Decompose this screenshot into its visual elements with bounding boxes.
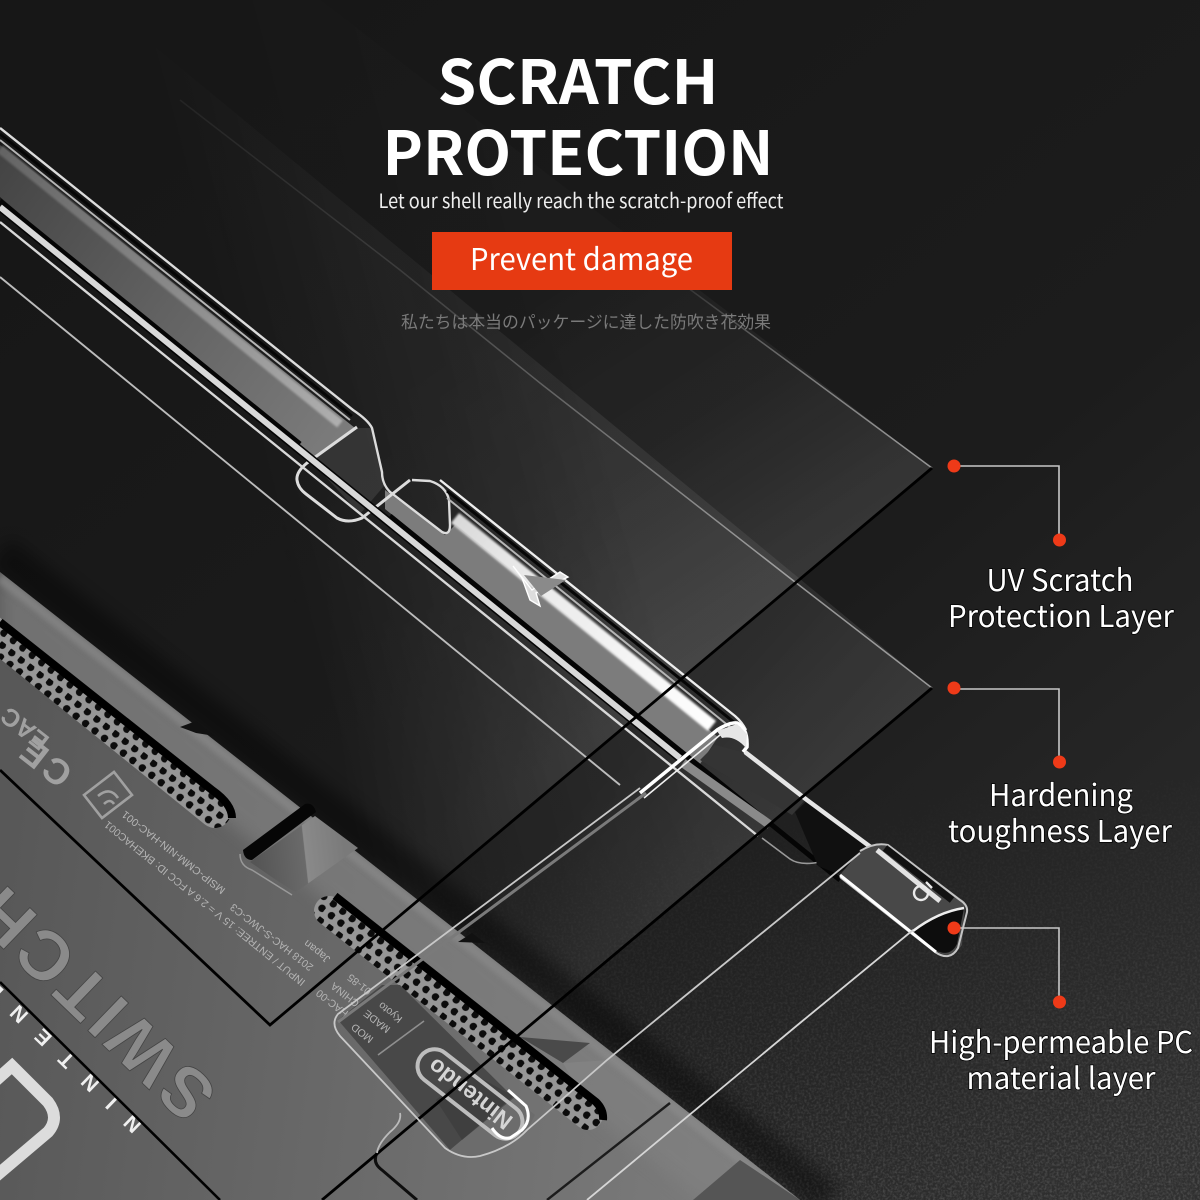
shell model text: 01-85 xyxy=(345,971,374,997)
callout: high-permeable PC material layer: material layer xyxy=(966,1054,1156,1098)
lip line xyxy=(745,752,872,848)
shell inner divider xyxy=(378,1021,424,1055)
body surface xyxy=(0,572,800,1200)
end cap xyxy=(840,844,967,956)
tube clip detail xyxy=(513,566,568,606)
lower groove xyxy=(0,201,840,880)
callout: UV scratch protection layer xyxy=(948,460,1174,636)
shell model text: Kyoto xyxy=(376,999,405,1025)
regulatory text: Japan xyxy=(302,937,333,965)
film layer: UV scratch protection xyxy=(454,290,932,858)
switch logo outline xyxy=(0,1066,54,1176)
shell corner bump xyxy=(377,1113,400,1153)
console body xyxy=(0,552,830,1200)
bright stripe xyxy=(455,518,712,726)
shell outline inner xyxy=(338,793,646,1022)
title: PROTECTION xyxy=(382,104,774,193)
leather texture xyxy=(546,870,1200,1200)
cap dark groove xyxy=(885,848,952,900)
title: SCRATCH xyxy=(438,33,718,122)
power icon xyxy=(914,882,932,900)
lower tube lines xyxy=(0,207,820,863)
strip below flange xyxy=(683,763,770,825)
shell model text: MADE xyxy=(362,1007,393,1035)
notch clip loop xyxy=(297,427,410,521)
shell model text xyxy=(314,971,405,1045)
shell outline top xyxy=(334,788,860,1157)
regulatory text: MSIP-CMM-NIN-HAC-001 xyxy=(119,808,228,896)
badge: prevent damage: Prevent damage xyxy=(470,235,693,279)
title xyxy=(382,33,774,193)
inner dark end xyxy=(700,745,805,815)
film layer: hardening toughness xyxy=(180,100,932,984)
lower-right edge darks xyxy=(375,1103,670,1200)
hardening layer edge xyxy=(322,688,932,1200)
callout: high-permeable PC material layer xyxy=(929,922,1193,1098)
body lower-left edge xyxy=(0,982,220,1200)
vent right xyxy=(329,896,603,1120)
upper lines xyxy=(0,128,746,730)
cap white stripe xyxy=(877,850,940,901)
cap opening xyxy=(913,908,964,953)
tube band right xyxy=(385,490,718,764)
UV layer edge xyxy=(0,468,932,1025)
rim patches under films xyxy=(520,1037,590,1063)
shell flange fill xyxy=(717,724,747,748)
KC mark xyxy=(84,772,132,818)
cap lower edge xyxy=(840,875,936,952)
vent left xyxy=(0,622,232,818)
tube band left highlight xyxy=(0,149,340,424)
shell model text: MOD xyxy=(349,1020,376,1045)
body shadow xyxy=(0,552,830,1200)
small rim gaps xyxy=(180,721,485,943)
shell corner panel xyxy=(314,971,535,1157)
regulatory text: INPUT / ENTREE: 15 V = 2.6 A FCC ID: BKEHAC001 xyxy=(102,818,308,988)
badge highlight xyxy=(492,1090,528,1138)
badge: prevent damage xyxy=(432,232,732,290)
shell double line xyxy=(644,735,720,798)
rim band xyxy=(0,583,598,1096)
callout: hardening toughness layer: toughness Layer xyxy=(948,807,1172,851)
flange xyxy=(640,723,747,793)
latch notch xyxy=(240,804,358,895)
callout: hardening toughness layer xyxy=(948,682,1172,851)
shell model text: HAC-00 xyxy=(314,987,351,1019)
callout: UV scratch protection layer: UV Scratch xyxy=(986,556,1134,600)
callout: high-permeable PC material layer: High-permeable PC xyxy=(929,1018,1193,1062)
layer black edges and shell lines xyxy=(0,468,932,1200)
CE mark: CE xyxy=(9,728,80,796)
right lower darker zone xyxy=(693,1160,800,1200)
shell model text: CHINA xyxy=(329,980,362,1009)
callout: UV scratch protection layer: Protection Layer xyxy=(948,592,1174,636)
japanese caption: 私たちは本当のパッケージに達した防吹き花効果 xyxy=(401,309,771,333)
nintendo badge: Nintendo xyxy=(423,1053,517,1135)
callout: hardening toughness layer: Hardening xyxy=(989,771,1133,815)
nintendo badge xyxy=(411,1042,529,1146)
top highlight xyxy=(0,578,800,1200)
tube band left xyxy=(0,145,355,460)
certification marks xyxy=(0,701,132,818)
regulatory text: 2018 HAC-S-JWC-C3 xyxy=(228,901,316,973)
clear shell tube xyxy=(0,128,967,956)
cap front line xyxy=(587,930,913,1200)
notch interior glass xyxy=(310,428,384,514)
subtitle: Let our shell really reach the scratch-proof effect xyxy=(378,185,784,214)
